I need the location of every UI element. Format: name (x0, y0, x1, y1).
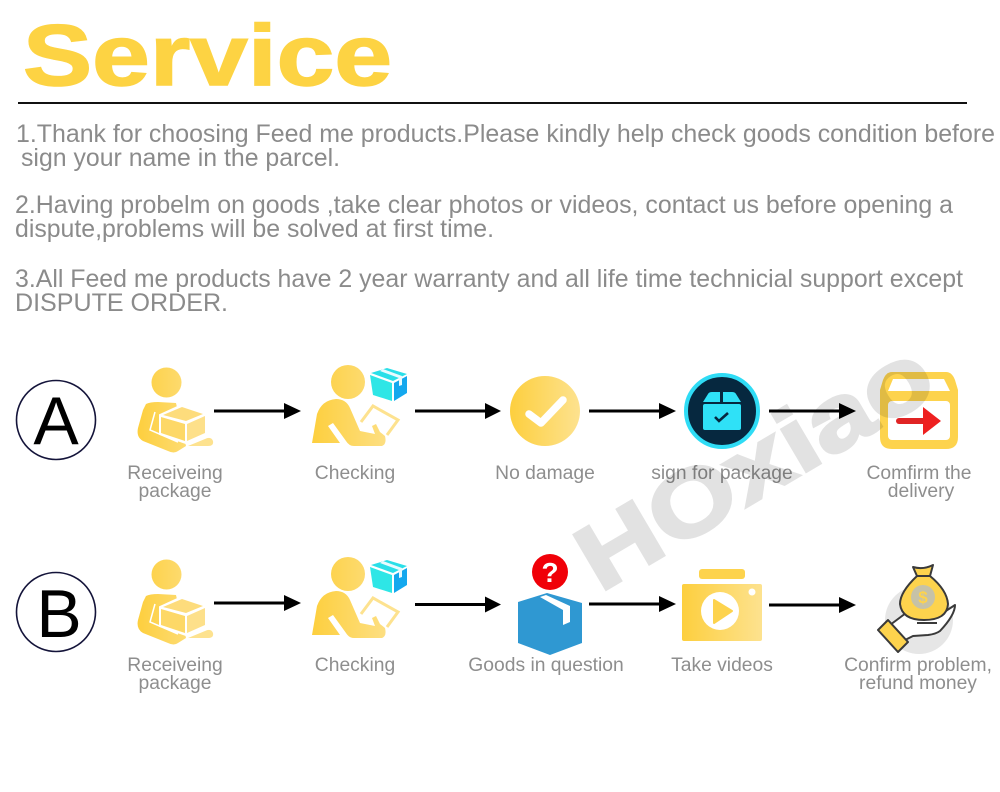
icon: red question badge (532, 554, 568, 590)
badge: B: B (36, 576, 82, 652)
watermark: HOxiao (558, 322, 950, 610)
label: Receiveing (127, 655, 223, 676)
icon: person checking with box (312, 557, 407, 638)
arrow B4 (769, 597, 856, 613)
icon: person holding box (138, 368, 213, 452)
flow B: step 5 confirm problem, refund (844, 565, 992, 694)
icon: red question badge: ? (541, 557, 559, 588)
label: Checking (315, 463, 395, 484)
instruction 3 (15, 265, 963, 317)
icon: dark circle with box (686, 375, 758, 447)
arrow A1 (214, 403, 301, 419)
title rule (18, 102, 967, 104)
label: package (139, 481, 211, 502)
icon: hand holding money bag (878, 565, 955, 654)
instruction 3: 3.All Feed me products have 2 year warranty and all life time technicial support except (15, 265, 963, 293)
flow B: step 1 receiving package (127, 560, 223, 694)
icon: box with red arrow (880, 372, 958, 449)
badge: B (16, 572, 96, 652)
instruction 2 (15, 191, 953, 243)
badge: A (16, 380, 96, 460)
title: Service (23, 8, 392, 104)
instruction 1: sign your name in the parcel. (21, 144, 340, 172)
icon: video camera (682, 569, 762, 641)
flow A: step 4 sign for package (651, 375, 793, 484)
flow A: step 3 no damage (495, 376, 595, 484)
flow B: step 2 checking (312, 557, 407, 676)
badge: A: A (33, 383, 79, 459)
label: No damage (495, 463, 595, 484)
label: package (139, 673, 211, 694)
arrow B2 (415, 596, 501, 612)
text block: instructions (15, 120, 995, 317)
label: Checking (315, 655, 395, 676)
arrow B1 (214, 595, 301, 611)
flow A: step 5 confirm delivery (866, 372, 972, 502)
flow B: step 3 goods in question (468, 554, 624, 676)
arrow A2 (415, 403, 501, 419)
label: Goods in question (468, 655, 624, 676)
arrow B3 (589, 596, 676, 612)
instruction 1: 1.Thank for choosing Feed me products.Please kindly help check goods condition before (16, 120, 995, 148)
label: Comfirm the (866, 463, 972, 484)
icon: hand holding money bag: $ (918, 588, 928, 607)
label: delivery (888, 481, 955, 502)
flow A: step 1 receiving package (127, 368, 223, 502)
arrow A3 (589, 403, 676, 419)
instruction 1 (16, 120, 995, 172)
arrow A4 (769, 403, 856, 419)
instruction 2: 2.Having probelm on goods ,take clear photos or videos, contact us before opening a (15, 191, 953, 219)
flow B: step 4 take videos (671, 569, 773, 676)
icon: check circle (510, 376, 580, 446)
icon: blue box (518, 593, 582, 655)
label: Receiveing (127, 463, 223, 484)
label: sign for package (651, 463, 793, 484)
label: Confirm problem, (844, 655, 992, 676)
icon: person holding box (138, 560, 213, 644)
flow A: step 2 checking (312, 365, 407, 484)
icon: person checking with box (312, 365, 407, 446)
instruction 2: dispute,problems will be solved at first time. (15, 215, 494, 243)
instruction 3: DISPUTE ORDER. (15, 289, 228, 317)
label: Take videos (671, 655, 773, 676)
label: refund money (859, 673, 977, 694)
